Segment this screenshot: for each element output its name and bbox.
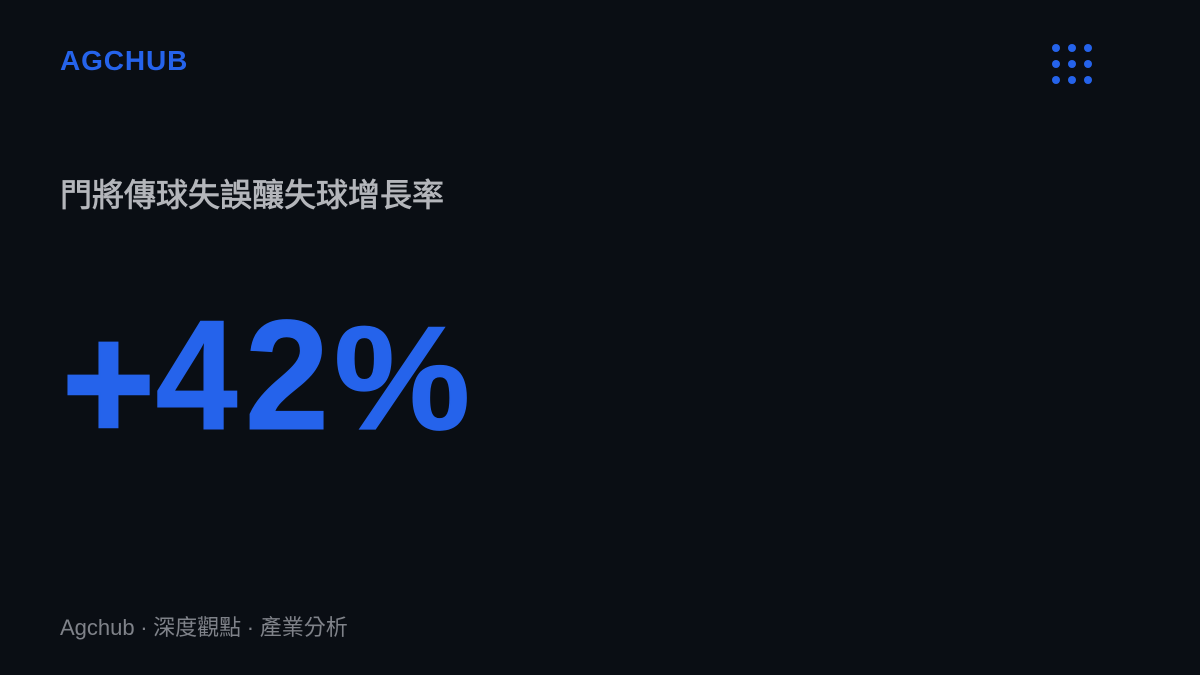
big statistic: 2 [245, 287, 329, 463]
icon: 3x3 dot grid [1052, 44, 1092, 84]
big statistic: + [62, 291, 155, 476]
heading: 門將傳球失誤釀失球增長率 [60, 177, 444, 213]
brand logo: AGCHUB: AGCHUB [60, 45, 188, 76]
big statistic: 4 [156, 288, 238, 463]
footer text: Agchub · 深度觀點 · 產業分析 [60, 615, 348, 640]
big statistic: % [334, 296, 470, 460]
